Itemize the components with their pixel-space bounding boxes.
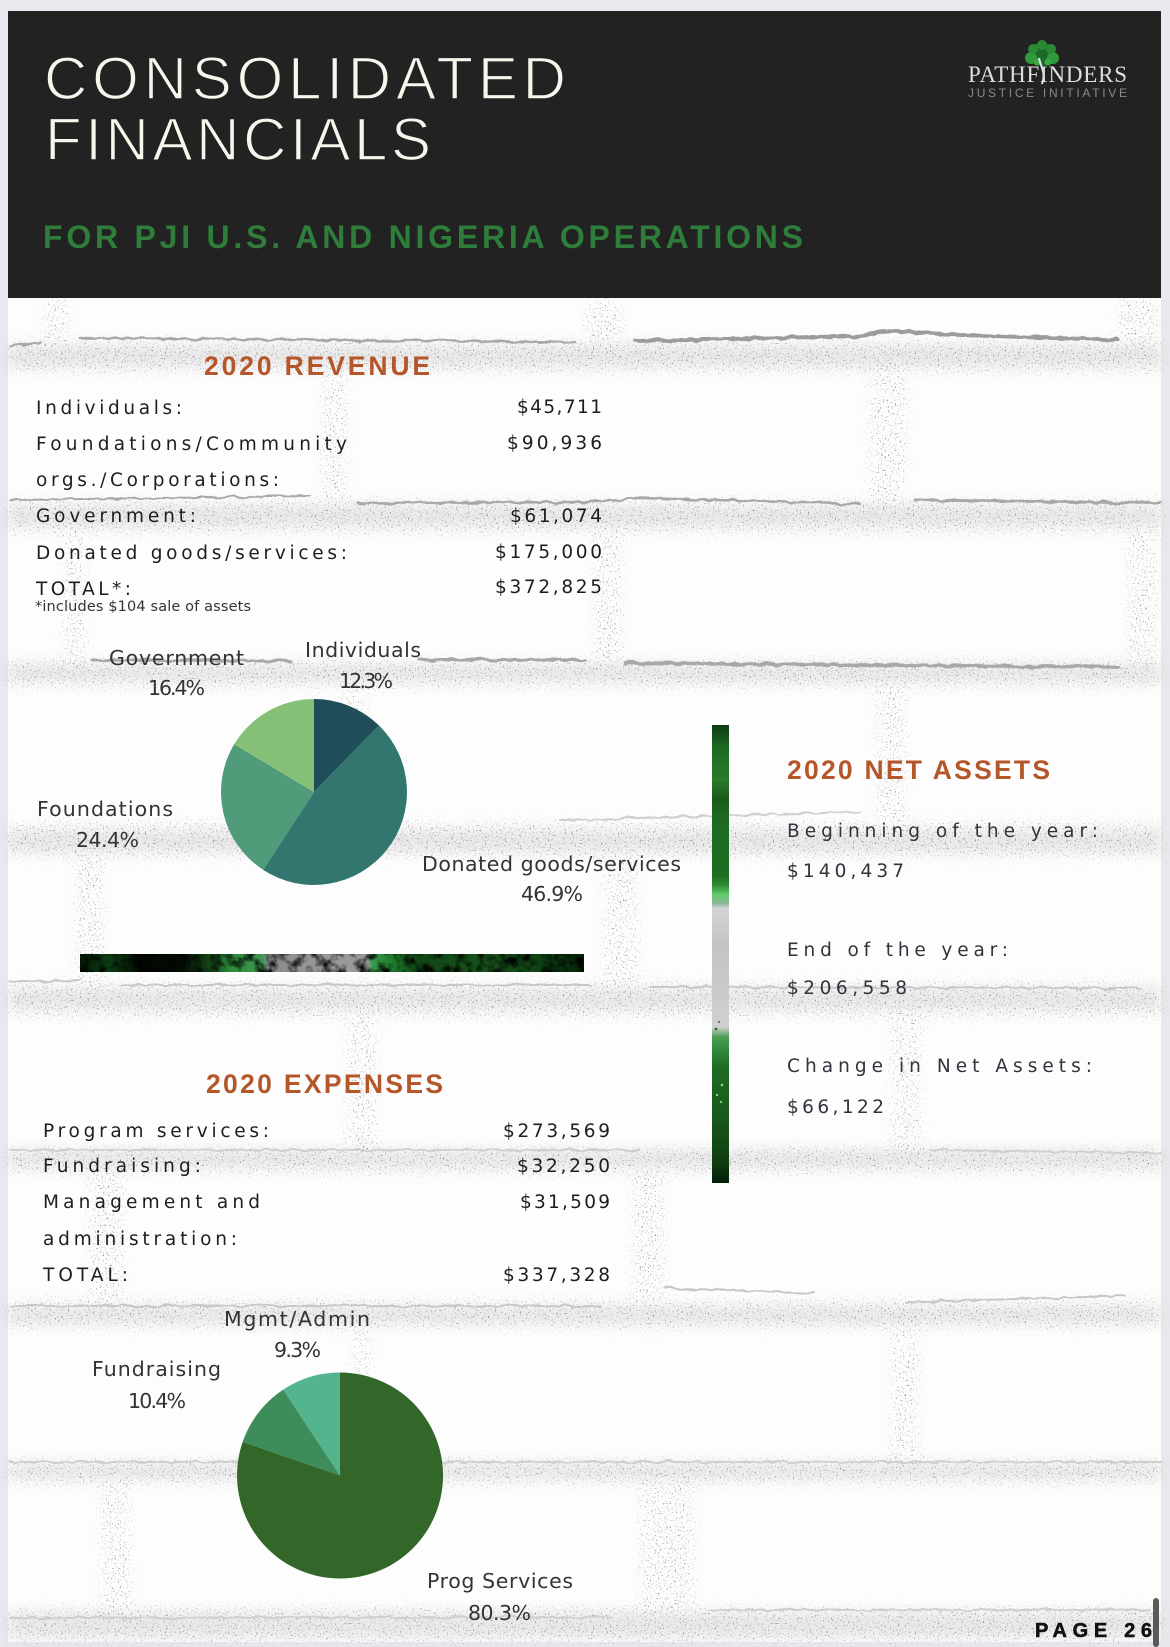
title: CONSOLIDATED bbox=[44, 45, 566, 112]
slice: program services bbox=[237, 1372, 443, 1578]
change in net assets: $66,122 bbox=[787, 1097, 884, 1118]
expense row: management bbox=[43, 1192, 610, 1250]
label: donated goods: 46.9% bbox=[521, 882, 583, 906]
vertical textured divider bbox=[712, 725, 729, 1183]
expense row: fundraising: $32,250 bbox=[517, 1156, 610, 1177]
change in net assets: Change in Net Assets: bbox=[787, 1056, 1092, 1077]
expense row: total: $337,328 bbox=[503, 1265, 610, 1286]
label: individuals: 12.3% bbox=[339, 669, 393, 693]
revenue row: foundations: Foundations/Community bbox=[36, 434, 347, 455]
revenue row: total: TOTAL*: bbox=[35, 579, 131, 600]
expense row: total bbox=[42, 1265, 610, 1286]
chart: revenue pie bbox=[37, 638, 681, 906]
revenue row: foundations: orgs./Corporations: bbox=[36, 470, 279, 491]
expense row: management: Management and bbox=[43, 1192, 260, 1213]
revenue row: donated goods bbox=[36, 542, 602, 564]
revenue row: government: $61,074 bbox=[510, 506, 602, 527]
beginning of year: Beginning of the year: bbox=[787, 821, 1098, 842]
revenue row: total: $372,825 bbox=[495, 577, 602, 598]
expense row: management: $31,509 bbox=[520, 1192, 610, 1213]
slice: donated goods bbox=[263, 725, 407, 885]
logo: Pathfinders Justice Initiative: PATHFINDERS bbox=[968, 62, 1127, 87]
label: fundraising: 10.4% bbox=[128, 1389, 186, 1413]
expense row: fundraising bbox=[43, 1156, 610, 1177]
label: government: 16.4% bbox=[148, 676, 205, 700]
label: mgmt/admin: 9.3% bbox=[274, 1338, 321, 1362]
label: individuals bbox=[305, 638, 421, 693]
revenue row: individuals bbox=[36, 397, 602, 419]
icon: tree bbox=[1025, 40, 1059, 84]
slice: government bbox=[234, 699, 314, 792]
slice: individuals bbox=[314, 699, 379, 792]
title bbox=[44, 45, 566, 173]
slice: fundraising bbox=[243, 1390, 340, 1476]
revenue row: individuals: Individuals: bbox=[36, 398, 182, 419]
change in net assets bbox=[787, 1056, 1092, 1118]
label: government: Government bbox=[109, 646, 244, 670]
page number: PAGE 26 bbox=[1035, 1620, 1152, 1642]
label: foundations: Foundations bbox=[37, 797, 173, 821]
heading: 2020 expenses: 2020 EXPENSES bbox=[206, 1069, 443, 1099]
subtitle: FOR PJI U.S. AND NIGERIA OPERATIONS bbox=[43, 219, 803, 255]
label: individuals: Individuals bbox=[305, 638, 421, 662]
label: program services bbox=[427, 1569, 573, 1625]
slice: foundations bbox=[221, 744, 314, 870]
revenue row: donated goods: Donated goods/services: bbox=[36, 543, 347, 564]
end of year bbox=[787, 940, 1008, 999]
beginning of year: $140,437 bbox=[787, 861, 904, 882]
revenue row: government bbox=[36, 506, 602, 527]
panel: 2020 revenue bbox=[35, 351, 602, 615]
end of year: $206,558 bbox=[787, 978, 907, 999]
expense row: program services: $273,569 bbox=[503, 1121, 610, 1142]
label: fundraising: Fundraising bbox=[92, 1357, 221, 1381]
label: fundraising bbox=[92, 1357, 221, 1413]
label: foundations bbox=[37, 797, 173, 852]
footnote: *includes $104 sale of assets bbox=[35, 599, 251, 615]
logo: Pathfinders Justice Initiative bbox=[968, 40, 1127, 100]
chart: expenses pie bbox=[92, 1307, 573, 1625]
label: mgmt/admin bbox=[224, 1307, 370, 1362]
expense row: fundraising: Fundraising: bbox=[43, 1156, 201, 1177]
slice: management bbox=[283, 1372, 340, 1476]
revenue row: individuals: $45,711 bbox=[517, 397, 602, 418]
revenue row: total bbox=[35, 577, 602, 600]
expense row: management: administration: bbox=[43, 1229, 237, 1250]
beginning of year bbox=[787, 821, 1098, 882]
revenue row: foundations: $90,936 bbox=[507, 433, 602, 454]
label: foundations: 24.4% bbox=[76, 828, 139, 852]
label: mgmt/admin: Mgmt/Admin bbox=[224, 1307, 370, 1331]
panel: 2020 net assets bbox=[787, 755, 1098, 1118]
title: FINANCIALS bbox=[45, 106, 431, 173]
expense row: program services bbox=[43, 1121, 610, 1142]
expense row: total: TOTAL: bbox=[42, 1265, 128, 1286]
label: donated goods: Donated goods/services bbox=[422, 852, 681, 876]
revenue row: foundations bbox=[36, 433, 602, 491]
logo: Pathfinders Justice Initiative: JUSTICE INITIATIVE bbox=[968, 86, 1127, 100]
label: government bbox=[109, 646, 244, 700]
revenue row: donated goods: $175,000 bbox=[495, 542, 602, 563]
header band bbox=[8, 11, 1161, 298]
end of year: End of the year: bbox=[787, 940, 1008, 961]
expense row: program services: Program services: bbox=[43, 1121, 269, 1142]
horizontal textured divider bbox=[80, 954, 584, 972]
heading: 2020 revenue: 2020 REVENUE bbox=[204, 351, 430, 381]
label: program services: Prog Services bbox=[427, 1569, 573, 1593]
label: donated goods bbox=[422, 852, 681, 906]
scrollbar bbox=[1153, 1598, 1159, 1647]
revenue row: government: Government: bbox=[36, 506, 196, 527]
panel: 2020 expenses bbox=[42, 1069, 610, 1286]
label: program services: 80.3% bbox=[468, 1601, 531, 1625]
heading: 2020 net assets: 2020 NET ASSETS bbox=[787, 755, 1050, 785]
